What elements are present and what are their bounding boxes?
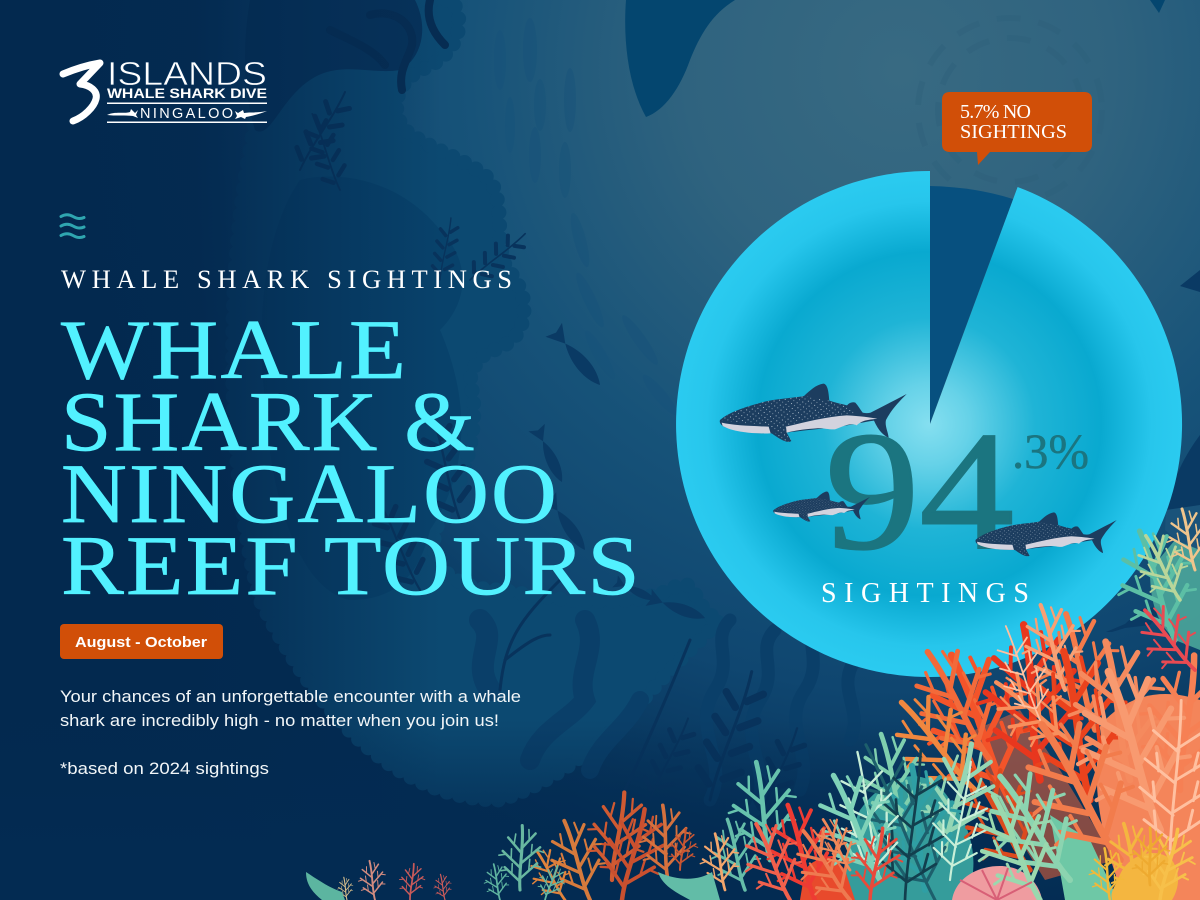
background: reef silhouette <box>250 0 662 808</box>
pie value: 94.3% <box>830 434 1088 551</box>
background: deep ocean gradient <box>250 0 1200 860</box>
logo rules and mini sharks <box>107 102 267 123</box>
coral reef illustration <box>306 504 1200 900</box>
title: WHALE <box>61 303 408 397</box>
body text <box>60 687 521 778</box>
pie value: 94.3%: .3% <box>1012 423 1089 479</box>
background: dark upper reef and tendrils <box>269 0 449 126</box>
whale shark large <box>720 384 907 442</box>
body text: Your chances of an unforgettable encounter with a whale <box>60 687 521 706</box>
callout: 5.7% no sightings: 5.7% NO <box>960 101 1031 123</box>
whale shark medium <box>976 512 1117 556</box>
coral: yellow cluster <box>1087 818 1200 900</box>
background: left and bottom fade <box>107 0 810 816</box>
coral: low reef along the bottom edge <box>306 788 720 900</box>
background: right edge shark silhouettes <box>1106 0 1200 632</box>
pie segment: 94.3% sightings <box>676 171 1182 677</box>
body text: *based on 2024 sightings <box>60 759 269 778</box>
background: lower right reef patch <box>1168 505 1200 548</box>
logo mark: brush 3 <box>63 63 100 121</box>
logo wordmark: WHALE SHARK DIVE <box>107 85 267 101</box>
background: darker reef layer behind title <box>261 177 462 600</box>
pie label: sightings: SIGHTINGS <box>821 578 1029 609</box>
title: REEF TOURS <box>61 519 642 613</box>
title: SHARK & <box>61 375 477 469</box>
background: fish school <box>494 18 681 419</box>
callout: 5.7% no sightings <box>942 92 1092 165</box>
callout: 5.7% no sightings: SIGHTINGS <box>960 121 1067 143</box>
coral: pink fan details <box>960 868 1032 900</box>
chart: sightings pie <box>676 171 1182 677</box>
coral: colour masses <box>800 540 1200 900</box>
logo: 3 Islands Whale Shark Dive Ningaloo <box>63 55 267 123</box>
background: dark ferns and fronds <box>288 85 811 826</box>
title <box>60 321 634 596</box>
coral: pink and red lower left of reef <box>700 802 904 900</box>
pie value: 94.3%: 94 <box>825 397 1014 585</box>
background: large shark fin silhouette <box>625 0 735 117</box>
pie segment: 5.7% no sightings <box>930 186 1013 423</box>
logo wordmark: ISLANDS <box>107 55 267 92</box>
whale shark small <box>773 491 870 522</box>
icon: waves <box>61 215 84 238</box>
logo wordmark <box>107 62 266 118</box>
date badge: august to october: August - October <box>75 634 207 651</box>
logo wordmark: NINGALOO <box>140 106 233 122</box>
background: dark swimming fish <box>528 323 708 626</box>
background: fine kelp strands <box>498 579 692 730</box>
date badge: august to october <box>60 624 223 659</box>
coral: red and orange branches <box>894 602 1200 873</box>
body text: shark are incredibly high - no matter when you join us! <box>60 711 499 730</box>
title: NINGALOO <box>61 447 559 541</box>
background: swirling fish ring <box>918 18 1102 202</box>
coral: teal and green branches <box>703 504 1200 900</box>
heading: whale shark sightings: WHALE SHARK SIGHTINGS <box>61 264 512 294</box>
background: kelp silhouettes <box>480 620 855 810</box>
